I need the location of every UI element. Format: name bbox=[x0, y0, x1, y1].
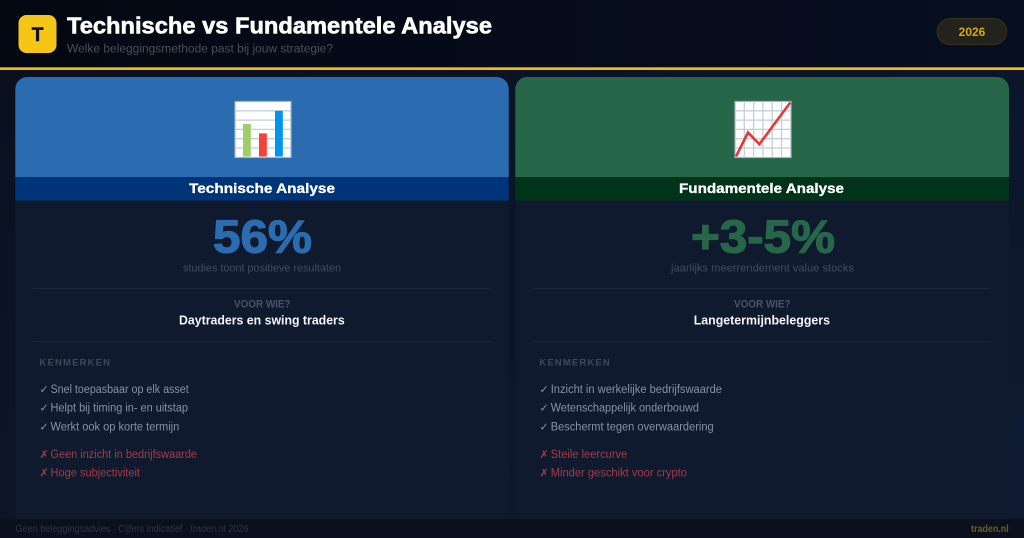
target audience: VOOR WIE? bbox=[734, 299, 791, 311]
cons list: Hoge subjectiviteit bbox=[50, 468, 141, 480]
pros list: ✓ bbox=[540, 402, 549, 415]
panel banner: green bbox=[515, 77, 1009, 177]
cons list: ✗ bbox=[540, 467, 549, 480]
statistic: +3-5%: +3-5% bbox=[691, 211, 835, 263]
icon: bar chart bbox=[235, 102, 291, 158]
panel title bar: Fundamentele Analyse bbox=[679, 181, 845, 196]
target audience: Daytraders en swing traders bbox=[179, 312, 345, 327]
pros list: ✓ bbox=[40, 383, 49, 396]
statistic caption: jaarlijks meerrendement value stocks bbox=[670, 263, 854, 275]
pros list: Helpt bij timing in- en uitstap bbox=[50, 403, 188, 415]
pros list: Wetenschappelijk onderbouwd bbox=[551, 403, 699, 415]
year badge: 2026 bbox=[959, 27, 985, 39]
cons list bbox=[540, 448, 687, 480]
features heading: KENMERKEN bbox=[539, 358, 610, 369]
cons list: Steile leercurve bbox=[551, 449, 627, 461]
target audience: VOOR WIE? bbox=[234, 299, 291, 311]
cons list: ✗ bbox=[40, 448, 49, 461]
logo badge: T bbox=[32, 25, 44, 46]
pros list: Inzicht in werkelijke bedrijfswaarde bbox=[551, 384, 722, 396]
panel title bar bbox=[15, 177, 509, 200]
cons list: ✗ bbox=[40, 467, 49, 480]
disclaimer: Geen beleggingsadvies · Cijfers indicatief · traden.nl 2026 bbox=[16, 524, 249, 535]
statistic caption: studies toont positieve resultaten bbox=[183, 263, 341, 275]
panel title bar: Technische Analyse bbox=[189, 181, 336, 196]
header bbox=[0, 0, 1024, 70]
panel banner: blue bbox=[15, 77, 509, 177]
features heading: KENMERKEN bbox=[40, 358, 110, 369]
pros list bbox=[40, 383, 189, 433]
logo badge bbox=[18, 15, 56, 53]
brand: traden.nl bbox=[971, 524, 1009, 535]
icon: line chart bbox=[735, 102, 791, 158]
pros list: Snel toepasbaar op elk asset bbox=[50, 384, 189, 396]
panel: fundamentele analyse bbox=[515, 77, 1009, 521]
pros list bbox=[540, 383, 722, 433]
subtitle: Welke beleggingsmethode past bij jouw strategie? bbox=[67, 44, 333, 56]
year badge bbox=[937, 18, 1007, 44]
target audience bbox=[179, 299, 345, 327]
panel: technische analyse bbox=[15, 77, 509, 521]
footer bbox=[0, 519, 1024, 538]
cons list: Minder geschikt voor crypto bbox=[551, 468, 687, 480]
cons list bbox=[40, 448, 197, 480]
pros list: ✓ bbox=[540, 420, 549, 433]
panel title bar bbox=[515, 177, 1009, 200]
cons list: Geen inzicht in bedrijfswaarde bbox=[50, 449, 197, 461]
target audience bbox=[694, 299, 830, 327]
pros list: ✓ bbox=[540, 383, 549, 396]
pros list: ✓ bbox=[40, 402, 49, 415]
pros list: ✓ bbox=[40, 420, 49, 433]
target audience: Langetermijnbeleggers bbox=[694, 312, 830, 327]
title: Technische vs Fundamentele Analyse bbox=[67, 13, 492, 39]
pros list: Beschermt tegen overwaardering bbox=[551, 421, 714, 433]
cons list: ✗ bbox=[540, 448, 549, 461]
statistic: 56%: 56% bbox=[213, 211, 312, 263]
pros list: Werkt ook op korte termijn bbox=[50, 421, 179, 433]
